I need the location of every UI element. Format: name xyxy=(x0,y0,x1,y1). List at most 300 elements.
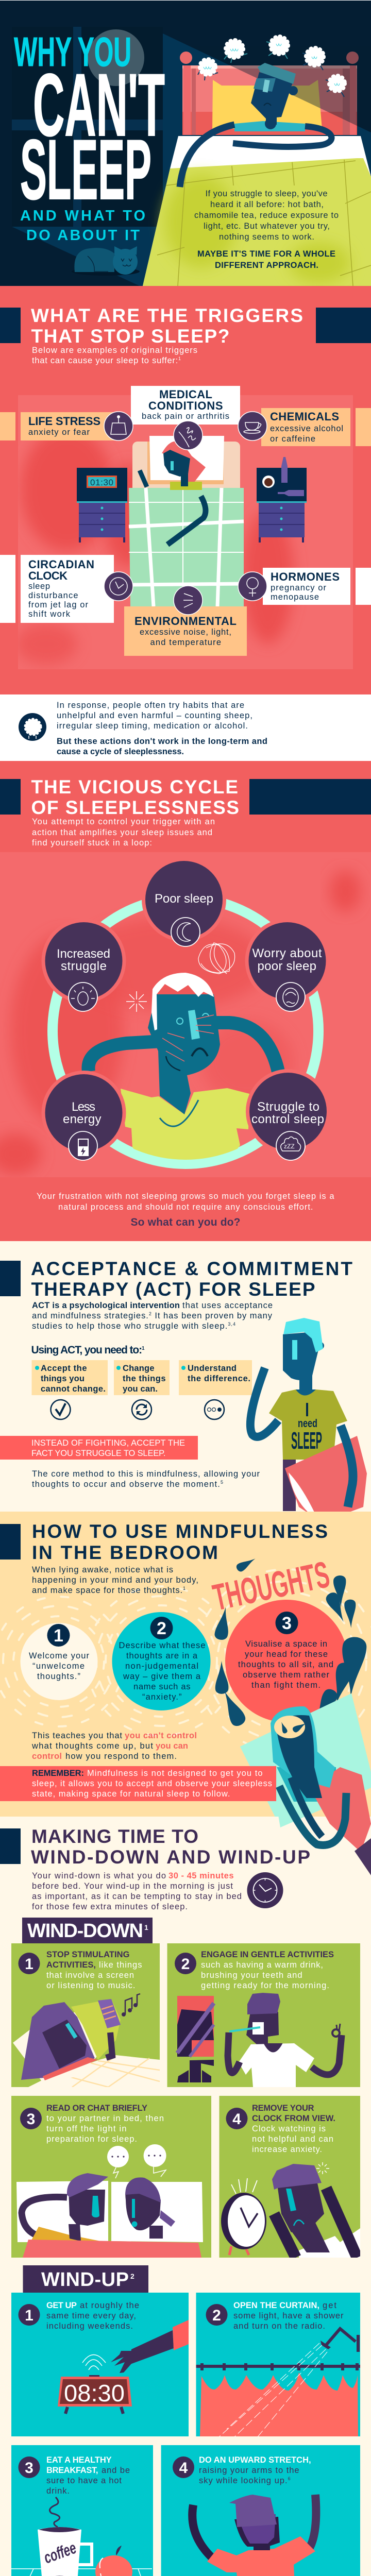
node: less energy: energy xyxy=(63,1112,101,1126)
card: medical conditions: back pain or arthritis xyxy=(142,412,229,421)
intro text: It has been proven by many xyxy=(152,1311,273,1320)
step text xyxy=(46,2455,130,2496)
intro text: happening in your mind and your body, xyxy=(32,1575,198,1585)
tab: wind-up: WIND-UP xyxy=(41,2269,129,2291)
step text: drink. xyxy=(46,2486,70,2496)
node: increased struggle: Increased xyxy=(57,947,110,961)
illustration: man awake in bed xyxy=(143,37,371,286)
node: struggle to control sleep xyxy=(246,1069,330,1160)
intro text: that uses acceptance xyxy=(182,1301,273,1310)
icon: cat xyxy=(72,246,140,276)
icon: burst xyxy=(126,991,147,1012)
heading: IN THE BEDROOM xyxy=(32,1542,218,1563)
step text: DO AN UPWARD STRETCH, xyxy=(199,2455,311,2465)
illustration: coffee mug: coffee xyxy=(41,2538,79,2567)
card: circadian clock: CIRCADIAN xyxy=(28,558,94,571)
heading: MAKING TIME TO xyxy=(31,1826,198,1847)
step text: turn off the light in xyxy=(46,2124,127,2133)
card: hormones: menopause xyxy=(271,592,319,602)
step text: to your partner in bed, then xyxy=(46,2114,164,2123)
illustration: arm reaching xyxy=(111,2320,189,2373)
heading xyxy=(32,1521,328,1563)
card: upward stretch xyxy=(161,2445,360,2576)
text block xyxy=(57,701,267,756)
card: eat breakfast xyxy=(11,2445,153,2576)
card: environmental: ENVIRONMENTAL xyxy=(134,615,237,628)
head and neck xyxy=(148,994,220,1114)
step text: get xyxy=(323,2301,336,2310)
illustration: woman in bed xyxy=(77,436,307,606)
step text xyxy=(233,2301,344,2331)
badge: 3 xyxy=(25,2460,33,2477)
illustration: man brushing teeth xyxy=(228,1993,342,2087)
decorative bar xyxy=(0,1828,21,1864)
panel: mindfulness xyxy=(0,1512,371,1827)
card: step 3 read or chat xyxy=(11,2096,211,2258)
heading: OF SLEEPLESSNESS xyxy=(31,797,239,818)
step text: EAT A HEALTHY xyxy=(46,2455,112,2465)
illustration: coffee mug xyxy=(38,2527,92,2576)
illustration: worried man xyxy=(272,2162,360,2258)
illustration: woman in mindfulness xyxy=(240,1693,371,1875)
step 1: Welcome your xyxy=(29,1651,90,1660)
intro text: You attempt to control your trigger with an xyxy=(32,817,215,826)
step text: REMOVE YOUR xyxy=(252,2104,314,2113)
title xyxy=(14,29,165,244)
callout banner xyxy=(0,1436,198,1460)
card: chemicals xyxy=(261,408,371,446)
heading: WHAT ARE THE TRIGGERS xyxy=(31,305,303,326)
badge xyxy=(226,2108,247,2129)
shirt: SLEEP xyxy=(291,1427,322,1454)
step text: some light, have a shower xyxy=(233,2311,344,2320)
decorative bars xyxy=(0,308,21,343)
thought drops xyxy=(214,1555,367,1728)
step text: brushing your teeth and xyxy=(201,1971,302,1980)
neck and head xyxy=(251,63,298,129)
icon: refresh xyxy=(132,1400,151,1419)
badge: 2 xyxy=(181,1956,190,1973)
card: get up xyxy=(11,2293,189,2436)
step text: and be xyxy=(102,2466,130,2475)
text block xyxy=(32,1469,260,1489)
step text: CLOCK FROM VIEW. xyxy=(252,2114,335,2123)
step 2: “anxiety.” xyxy=(142,1692,181,1702)
callout banner: INSTEAD OF FIGHTING, ACCEPT THE xyxy=(31,1438,185,1448)
text block: you can xyxy=(156,1741,188,1751)
window xyxy=(12,27,163,227)
intro text xyxy=(31,1301,273,1356)
hands xyxy=(162,1015,214,1061)
intro text: MAYBE IT'S TIME FOR A WHOLE xyxy=(197,249,335,259)
legs xyxy=(283,1460,296,1511)
card: understand xyxy=(179,1360,252,1395)
intro text xyxy=(32,1565,198,1595)
panel: hero xyxy=(0,0,371,286)
nightstand left with clock: 01:30 xyxy=(90,478,113,487)
icon: female symbol xyxy=(238,572,267,601)
node: struggle to control sleep: control sleep xyxy=(251,1112,324,1126)
badge: 4 xyxy=(232,2111,241,2128)
card: change xyxy=(114,1360,170,1395)
closing text: So what can you do? xyxy=(131,1216,240,1228)
icon: scribble xyxy=(198,943,235,974)
intro text xyxy=(194,189,339,270)
cycle background xyxy=(0,852,371,1177)
step text: BREAKFAST, xyxy=(46,2466,98,2475)
step text xyxy=(46,2301,139,2331)
node: poor sleep xyxy=(142,857,226,946)
step 1: thoughts.” xyxy=(37,1672,80,1681)
icon: clock xyxy=(247,1872,283,1908)
hair xyxy=(151,973,214,1030)
card: environmental: excessive noise, light, xyxy=(140,628,231,637)
title: AND WHAT TO xyxy=(20,208,145,224)
shirt: need xyxy=(298,1417,317,1430)
step text: sure to have a hot xyxy=(46,2476,122,2485)
card: accept: things you xyxy=(41,1374,85,1383)
shirt xyxy=(234,121,305,131)
title: SLEEP xyxy=(20,122,151,217)
step 1: “unwelcome xyxy=(32,1662,85,1671)
badge xyxy=(19,1953,40,1974)
step text xyxy=(46,2104,164,2144)
icon: alarm clock 08:30: 08:30 xyxy=(64,2380,125,2406)
badge xyxy=(19,2456,40,2478)
hair xyxy=(283,1318,323,1352)
closing text: natural process and should not require any conscious effort. xyxy=(58,1202,313,1212)
heading: THAT STOP SLEEP? xyxy=(31,326,230,347)
intro text: 30 - 45 minutes xyxy=(168,1871,234,1880)
ear xyxy=(317,1342,324,1349)
card: chemicals: CHEMICALS xyxy=(270,410,339,423)
text block xyxy=(31,1731,197,1761)
step text xyxy=(199,2455,311,2485)
step 2: 2 xyxy=(157,1619,166,1638)
illustration: alarm clock xyxy=(221,2178,266,2255)
panel: vicious cycle xyxy=(0,761,371,1241)
intro text: find yourself stuck in a loop: xyxy=(32,838,152,848)
arm raised xyxy=(250,1368,278,1437)
text block: what thoughts come up, but xyxy=(31,1741,153,1751)
illustration: table lines xyxy=(11,2569,152,2576)
subheading: 1 xyxy=(178,356,181,361)
card: circadian clock xyxy=(0,555,114,623)
badge: 1 xyxy=(25,1956,33,1973)
text block: irregular sleep timing, medication or alcohol. xyxy=(57,721,248,731)
icon: back pain xyxy=(174,421,203,450)
card: hormones: pregnancy or xyxy=(271,583,327,592)
card: accept: cannot change. xyxy=(41,1384,106,1394)
tab: wind-up: 2 xyxy=(130,2272,134,2280)
card: step 4 remove clock xyxy=(220,2096,360,2258)
decorative bars xyxy=(0,779,21,815)
heading: ACCEPTANCE & COMMITMENT xyxy=(31,1258,352,1279)
intro text: studies to help those who struggle with sleep. xyxy=(32,1321,227,1331)
title: WHY YOU xyxy=(14,29,131,75)
illustration: couple in bed xyxy=(16,2173,203,2258)
heading xyxy=(31,1826,310,1868)
step 3: thoughts to all sit, and xyxy=(238,1660,333,1669)
card: environmental: and temperature xyxy=(150,638,221,647)
step 2: thoughts are in a xyxy=(126,1651,198,1660)
right arm xyxy=(341,1426,353,1507)
step text: like things xyxy=(99,1960,142,1970)
illustration: woman with phone in bed xyxy=(13,1994,160,2087)
card: chemicals: excessive alcohol xyxy=(270,424,343,433)
step text: and turn on the radio. xyxy=(233,2321,325,2331)
woman xyxy=(140,441,206,545)
neck xyxy=(299,1373,312,1393)
panel: hero: CAN'T xyxy=(33,56,165,155)
badge xyxy=(19,2304,40,2326)
text block: how you respond to them. xyxy=(65,1752,177,1761)
card: understand: Understand xyxy=(188,1364,237,1373)
icon: sheep badge xyxy=(19,713,46,741)
callout: remember: state, making space for natural sleep to follow. xyxy=(32,1789,230,1799)
node: increased struggle: struggle xyxy=(61,959,107,973)
step 1 xyxy=(21,1623,98,1700)
icon: clock xyxy=(104,572,133,601)
heading: THERAPY (ACT) FOR SLEEP xyxy=(31,1279,315,1300)
step 1: 1 xyxy=(54,1626,63,1646)
step 3: Visualise a space in xyxy=(245,1639,327,1649)
text block: control xyxy=(32,1752,62,1761)
decorative pattern xyxy=(0,1569,371,1753)
illustration: man stretching xyxy=(192,2495,316,2576)
step text: at roughly the xyxy=(80,2301,139,2310)
shirt xyxy=(269,1389,347,1460)
step text: increase anxiety. xyxy=(252,2145,322,2154)
node: poor sleep: Poor sleep xyxy=(155,892,213,906)
card: change: you can. xyxy=(123,1384,158,1394)
heading xyxy=(31,305,303,347)
card: medical conditions: CONDITIONS xyxy=(148,399,223,412)
nose xyxy=(292,1340,297,1360)
badge xyxy=(173,2456,194,2478)
step text: that involve a screen xyxy=(46,1971,134,1980)
badge xyxy=(20,2108,42,2129)
arms xyxy=(88,1023,278,1072)
callout: remember xyxy=(0,1766,276,1801)
badge: 3 xyxy=(27,2111,35,2128)
intro text: ACT is a psychological intervention xyxy=(32,1301,180,1310)
card: life stress: LIFE STRESS xyxy=(28,415,100,428)
subheading: Below are examples of original triggers xyxy=(32,346,197,355)
illustration: steam xyxy=(49,2497,60,2527)
step text: OPEN THE CURTAIN, xyxy=(233,2301,319,2310)
card: circadian clock: shift work xyxy=(28,609,71,619)
step 2: Describe what these xyxy=(119,1641,205,1650)
intro text: heard it all before: hot bath, xyxy=(210,200,324,209)
card: medical conditions xyxy=(131,386,240,425)
step text xyxy=(201,1950,334,1990)
step 2 xyxy=(112,1612,210,1710)
icon: coffee cup xyxy=(238,412,267,440)
illustration: shower curtain xyxy=(196,2329,360,2437)
step text: ENGAGE IN GENTLE ACTIVITIES xyxy=(201,1950,334,1959)
tab: wind-down: 1 xyxy=(144,1923,148,1931)
bedroom floor panel xyxy=(15,395,353,669)
step text: sky while looking up. xyxy=(199,2476,288,2485)
text block: This teaches you that xyxy=(32,1731,122,1740)
node: worry about poor sleep: Worry about xyxy=(252,946,322,960)
intro text: light, etc. But whatever you try, xyxy=(204,222,330,231)
icon: noise lines xyxy=(174,586,203,615)
text block: But these actions don't work in the long-term and xyxy=(57,737,267,746)
icon: alarm clock 08:30 xyxy=(58,2354,132,2414)
step 3: your head for these xyxy=(245,1650,328,1659)
intro text: If you struggle to sleep, you've xyxy=(205,189,328,198)
step 3 xyxy=(225,1600,348,1722)
callout: remember: sleep, it allows you to accept and observe your sleepless xyxy=(32,1779,272,1788)
step text xyxy=(46,1950,142,1990)
card: step 2 gentle activities xyxy=(167,1943,360,2087)
icon: speech bubbles xyxy=(107,2144,166,2178)
title: DO ABOUT IT xyxy=(26,227,140,244)
callout: remember: REMEMBER: xyxy=(32,1769,84,1778)
step text: Clock watching is xyxy=(252,2124,326,2133)
decorative bar xyxy=(0,1524,21,1560)
card: circadian clock: disturbance xyxy=(28,591,78,600)
illustration: apple xyxy=(95,2546,132,2576)
face details xyxy=(160,1010,209,1126)
intro text: 2 xyxy=(149,1311,151,1316)
intro text: DIFFERENT APPROACH. xyxy=(215,261,318,270)
badge: 4 xyxy=(179,2460,188,2477)
illustration: man with pillow xyxy=(250,1318,367,1521)
card: open curtain xyxy=(196,2293,360,2437)
text block: unhelpful and even harmful – counting sheep, xyxy=(57,711,252,720)
heading: HOW TO USE MINDFULNESS xyxy=(32,1521,328,1542)
step text: not helpful and can xyxy=(252,2134,333,2144)
intro text: When lying awake, notice what is xyxy=(32,1565,173,1574)
card: change: the things xyxy=(123,1374,166,1383)
duvet xyxy=(143,158,371,286)
card: step 1 stop stimulating xyxy=(11,1943,160,2087)
shirt xyxy=(121,1088,249,1160)
intro text: before bed. Your wind-up in the morning is just xyxy=(32,1882,233,1891)
step 3: than fight them. xyxy=(251,1681,321,1690)
tab: wind-down: WIND-DOWN xyxy=(27,1920,143,1942)
callout banner: FACT YOU STRUGGLE TO SLEEP. xyxy=(31,1449,166,1458)
head xyxy=(283,1332,318,1380)
card: environmental xyxy=(124,606,247,656)
callout: remember: Mindfulness is not designed to get you to xyxy=(87,1769,263,1778)
text block: 5 xyxy=(221,1480,223,1485)
panel: unhelpful habits xyxy=(0,694,371,761)
text block: thoughts to occur and observe the moment. xyxy=(32,1480,220,1489)
node: less energy xyxy=(41,1071,126,1160)
node: struggle to control sleep: Struggle to xyxy=(257,1100,319,1114)
card: circadian clock: sleep xyxy=(28,582,50,591)
bed xyxy=(129,436,244,606)
step text: ACTIVITIES, xyxy=(46,1960,96,1970)
intro text: action that amplifies your sleep issues and xyxy=(32,828,212,837)
card: hormones: HORMONES xyxy=(271,570,340,583)
badge xyxy=(175,1953,196,1974)
intro text xyxy=(32,817,215,848)
icon: dots xyxy=(205,1400,224,1419)
card: hormones xyxy=(263,568,371,605)
intro text: Your wind-down is what you do xyxy=(32,1871,166,1880)
illustration: sheet behind woman xyxy=(240,1693,371,1827)
card: accept: Accept the xyxy=(41,1364,87,1373)
intro text: 3,4 xyxy=(228,1321,235,1327)
card: medical conditions: MEDICAL xyxy=(159,388,212,401)
intro text: 1 xyxy=(142,1346,145,1351)
step text: 6 xyxy=(288,2476,291,2481)
step text: including weekends. xyxy=(46,2321,133,2331)
nightstand left with clock xyxy=(77,468,127,543)
icons: sheep xyxy=(198,37,345,97)
step 2: name such as xyxy=(133,1682,191,1691)
node: increased struggle xyxy=(41,919,126,1011)
card: understand: the difference. xyxy=(188,1374,250,1383)
closing text xyxy=(37,1192,334,1228)
floor and duvet xyxy=(143,136,371,286)
panel: triggers xyxy=(0,286,371,694)
panel: wind-down and wind-up xyxy=(0,1693,371,2576)
cycle ring xyxy=(53,898,318,1164)
closing text: Your frustration with not sleeping grows so much you forget sleep is a xyxy=(37,1192,334,1201)
step text: READ OR CHAT BRIEFLY xyxy=(46,2104,147,2113)
nightstand right with bottles xyxy=(257,457,307,543)
icon: tea bag xyxy=(104,412,133,440)
tab: wind-up xyxy=(23,2265,148,2293)
step text: same time every day, xyxy=(46,2311,136,2320)
step 3: observe them rather xyxy=(243,1670,330,1680)
heading: THE VICIOUS CYCLE xyxy=(31,776,238,798)
decorative bar xyxy=(0,1261,21,1296)
node: worry about poor sleep xyxy=(245,919,330,1011)
intro text: 1 xyxy=(183,1586,185,1591)
intro text: for those few extra minutes of sleep. xyxy=(32,1902,188,1911)
card: chemicals: or caffeine xyxy=(270,434,315,444)
arms xyxy=(180,125,332,187)
intro text: and mindfulness strategies. xyxy=(32,1311,148,1320)
step 2: way – give them a xyxy=(123,1672,201,1681)
step text: raising your arms to the xyxy=(199,2466,299,2475)
light beam xyxy=(12,33,371,286)
panel: ACT xyxy=(0,1241,371,1521)
icon: check xyxy=(50,1400,70,1419)
step text: STOP STIMULATING xyxy=(46,1950,130,1959)
pillow xyxy=(285,1436,367,1521)
node: less energy: Less xyxy=(72,1100,95,1114)
card: life stress xyxy=(0,412,119,440)
text block: The core method to this is mindfulness, allowing your xyxy=(32,1469,260,1479)
badge: 2 xyxy=(212,2307,221,2324)
intro text: nothing seems to work. xyxy=(219,232,314,242)
node: struggle to control sleep: zZZ xyxy=(284,1143,295,1150)
card: accept xyxy=(32,1360,108,1395)
illustration: frustrated man xyxy=(88,943,278,1175)
subheading: that can cause your sleep to suffer: xyxy=(32,356,178,365)
badge xyxy=(206,2304,228,2326)
text block: cause a cycle of sleeplessness. xyxy=(57,747,184,756)
node: worry about poor sleep: poor sleep xyxy=(258,959,316,973)
step text: preparation for sleep. xyxy=(46,2134,137,2144)
intro text: Using ACT, you need to: xyxy=(31,1344,142,1356)
step text xyxy=(252,2104,335,2154)
badge: 1 xyxy=(25,2307,33,2324)
step text: or listening to music. xyxy=(46,1981,135,1990)
card: circadian clock: from jet lag or xyxy=(28,600,89,609)
step text: such as having a warm drink, xyxy=(201,1960,323,1970)
card: circadian clock: CLOCK xyxy=(28,569,68,582)
step 2: non-judgemental xyxy=(125,1662,198,1671)
